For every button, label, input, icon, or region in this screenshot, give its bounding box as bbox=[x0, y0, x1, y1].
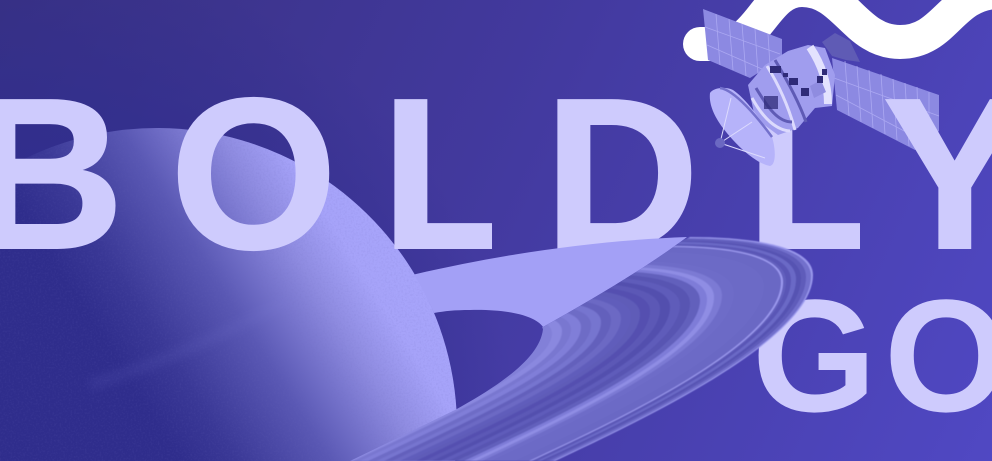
left solar panel bbox=[703, 9, 782, 78]
white wave ribbon bbox=[700, 0, 992, 44]
dish antenna bbox=[710, 88, 775, 166]
planet ring: shaded outer bands bbox=[300, 237, 813, 461]
satellite: left panel, body and dish bbox=[703, 9, 860, 166]
satellite: right solar panel bbox=[832, 58, 939, 150]
planet ring: lit inner wedge bbox=[414, 237, 687, 327]
rear module bbox=[822, 33, 860, 62]
planet sphere bbox=[0, 120, 460, 461]
main cylinder bbox=[748, 45, 835, 135]
